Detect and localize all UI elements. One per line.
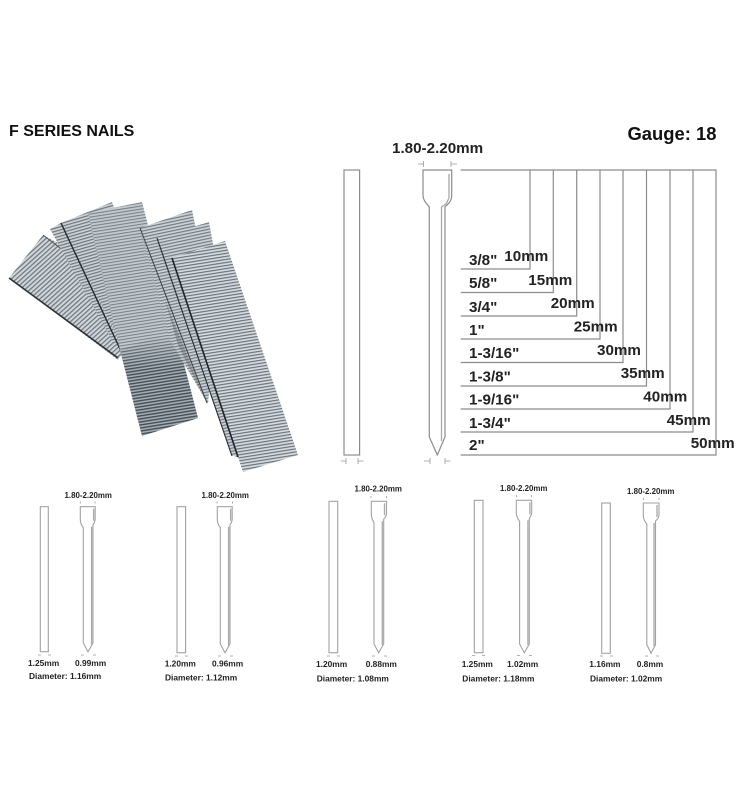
head width label: 1.80-2.20mm: [392, 140, 483, 157]
small diagram 3: 0.88mm: [366, 659, 397, 669]
length labels: 35mm: [621, 365, 665, 382]
length labels: 30mm: [597, 342, 641, 359]
small diagram 4: [462, 484, 547, 684]
small diagram 3: [316, 485, 402, 684]
small diagram 5: 1.80-2.20mm: [627, 487, 674, 496]
small diagram 3: 1.80-2.20mm: [354, 485, 402, 494]
length labels: 25mm: [574, 318, 618, 336]
small diagram 2: [165, 491, 249, 683]
length labels: 50mm: [691, 435, 735, 452]
title: F SERIES NAILS: [9, 123, 135, 140]
main diagram: nail side view: [341, 140, 483, 464]
small diagram 1: 1.25mm: [28, 658, 59, 668]
big nail front strip: [344, 170, 360, 455]
length labels: 15mm: [528, 272, 572, 289]
gauge heading: Gauge: 18: [628, 123, 716, 144]
small diagram 4: 1.25mm: [462, 659, 493, 669]
small diagram 2: 1.80-2.20mm: [202, 491, 249, 500]
length labels: 2": [469, 437, 485, 454]
length labels: 45mm: [667, 412, 711, 429]
small diagram 4: Diameter: 1.18mm: [462, 674, 534, 684]
length labels: 40mm: [643, 388, 687, 406]
small diagram 5: [589, 487, 674, 684]
small diagram 2: 0.96mm: [212, 659, 243, 669]
small diagram 5: 0.8mm: [637, 659, 663, 669]
length labels: 1-3/16": [469, 345, 519, 362]
small diagram 4: 1.80-2.20mm: [500, 484, 547, 493]
length labels: [469, 248, 735, 454]
big nail profile: [423, 170, 452, 455]
small diagram 3: Diameter: 1.08mm: [317, 674, 389, 684]
length labels: 3/4": [469, 299, 497, 316]
small diagram 3: 1.20mm: [316, 659, 347, 669]
small diagram 5: 1.16mm: [589, 659, 621, 669]
small diagram 2: Diameter: 1.12mm: [165, 673, 237, 683]
length labels: 1": [469, 322, 485, 339]
small diagram 4: 1.02mm: [507, 659, 538, 669]
small diagram 1: Diameter: 1.16mm: [29, 671, 101, 681]
length labels: 1-3/8": [469, 368, 511, 386]
small diagram 1: [28, 491, 112, 681]
small diagram 1: 0.99mm: [75, 658, 106, 668]
length labels: 10mm: [504, 248, 548, 265]
small diagram 2: 1.20mm: [165, 659, 196, 669]
length labels: 20mm: [551, 295, 595, 312]
length labels: 1-3/4": [469, 415, 511, 432]
length bracket lines: [461, 170, 716, 455]
length labels: 1-9/16": [469, 392, 519, 408]
width ticks: [341, 161, 457, 464]
length labels: 3/8": [469, 252, 497, 269]
length labels: 5/8": [469, 275, 497, 292]
photo: strips of brad nails: [9, 202, 298, 472]
small diagram 1: 1.80-2.20mm: [64, 491, 112, 500]
small diagram 5: Diameter: 1.02mm: [590, 674, 662, 684]
